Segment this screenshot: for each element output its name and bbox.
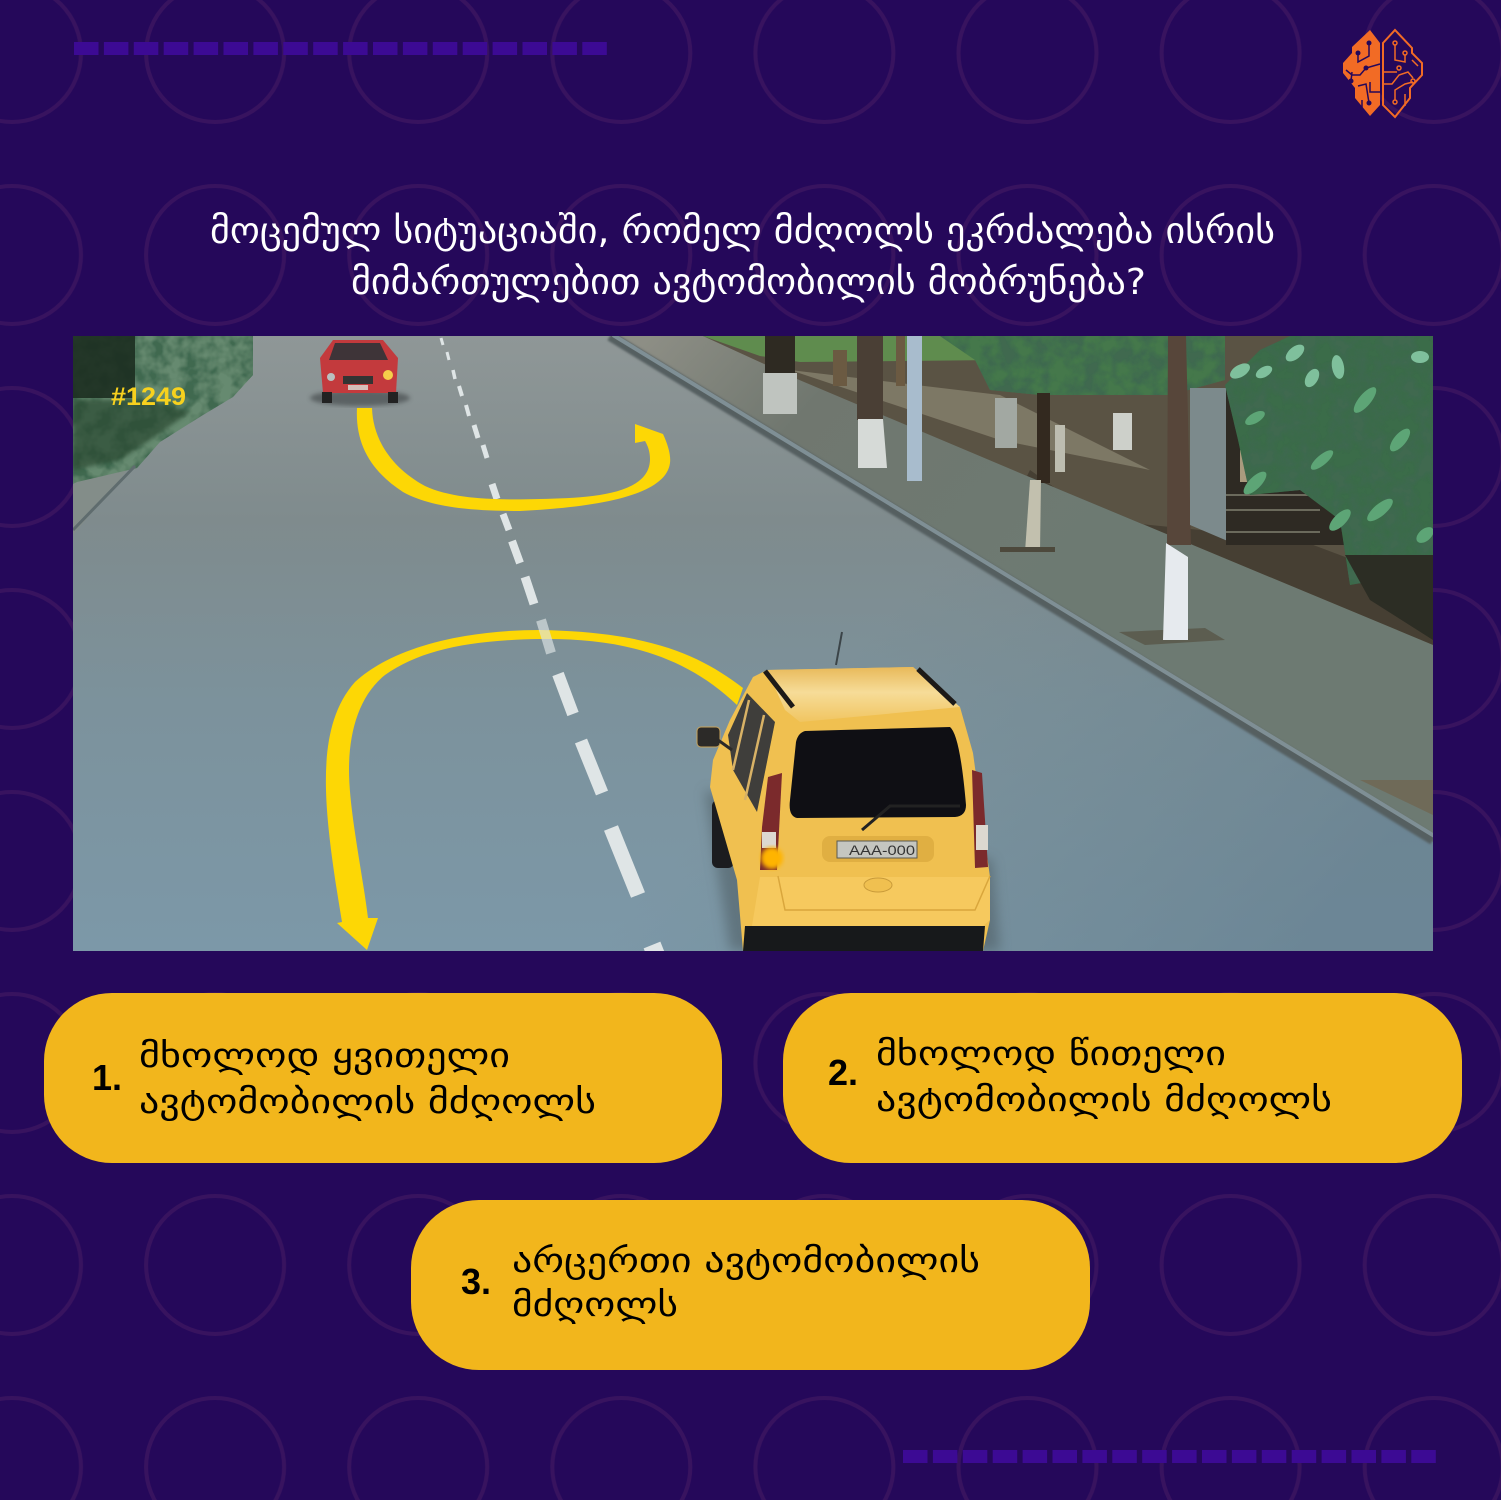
right sidewalk [612, 336, 1433, 842]
road surface [73, 336, 1433, 951]
title: მიმართულებით ავტომობილის მობრუნება? [351, 262, 1146, 303]
side mirror [697, 727, 732, 750]
title: მოცემულ სიტუაციაში, რომელ მძღოლს ეკრძალება ისრის [210, 211, 1275, 252]
icon: circuit brain logo [1343, 30, 1422, 117]
tail lights [760, 773, 782, 870]
arrow: yellow car turning path [326, 630, 743, 950]
right tree foliage [1225, 336, 1437, 585]
answer option 3: არცერთი ავტომობილის [512, 1241, 980, 1281]
left sidewalk [73, 336, 240, 535]
ground behind sidewalk [690, 336, 1433, 660]
kiosk [1190, 388, 1344, 545]
rear window [790, 727, 966, 818]
dark shrub [1345, 555, 1433, 640]
side windows [728, 693, 775, 812]
answer option 1: 1. [92, 1057, 122, 1098]
dark lower ground [1027, 470, 1433, 645]
question number: #1249 [111, 383, 186, 411]
antenna [836, 632, 842, 665]
number plate: AAA-000 [849, 842, 915, 858]
roof [767, 667, 960, 722]
answer option 2 [783, 993, 1462, 1163]
answer option 2: მხოლოდ წითელი [876, 1034, 1226, 1074]
car shadow [705, 790, 1000, 951]
center line dashes [441, 338, 660, 965]
answer option 3: 3. [461, 1261, 491, 1302]
grass strip [703, 336, 1000, 362]
center dash crossing arrow [541, 620, 551, 653]
small corner patch by curb [1360, 780, 1433, 815]
left wheel [712, 800, 734, 868]
answer option 1: მხოლოდ ყვითელი [139, 1036, 510, 1076]
tree trunks [763, 336, 1191, 552]
answer option 3: მძღოლს [512, 1285, 678, 1325]
bumper [752, 877, 990, 926]
indicator glow [761, 847, 783, 869]
roof rails [765, 669, 955, 707]
car body [710, 667, 990, 951]
arrow: red car turning path [357, 408, 670, 511]
top dashed decoration [74, 42, 607, 55]
panel: road photo [73, 335, 1437, 965]
utility pole [907, 336, 922, 481]
answer option 1: ავტომობილის მძღოლს [139, 1082, 596, 1122]
wiper [862, 806, 960, 830]
title [210, 211, 1275, 303]
plate recess [822, 836, 934, 862]
door handle [864, 878, 892, 892]
left curb line [73, 466, 135, 530]
background tree foliage [940, 336, 1225, 395]
answer option 3 [411, 1200, 1090, 1370]
curb [610, 335, 1436, 840]
rear underside [743, 926, 985, 951]
yellow car [697, 632, 1000, 951]
white painted trunk [1119, 543, 1225, 645]
answer option 2: ავტომობილის მძღოლს [876, 1080, 1332, 1120]
pale ground patches [790, 370, 1150, 470]
red car [310, 340, 410, 406]
answer option 2: 2. [828, 1052, 858, 1093]
answer option 1 [44, 993, 722, 1163]
left tree [73, 336, 253, 484]
number plate [837, 841, 917, 858]
bottom dashed decoration [903, 1450, 1436, 1463]
